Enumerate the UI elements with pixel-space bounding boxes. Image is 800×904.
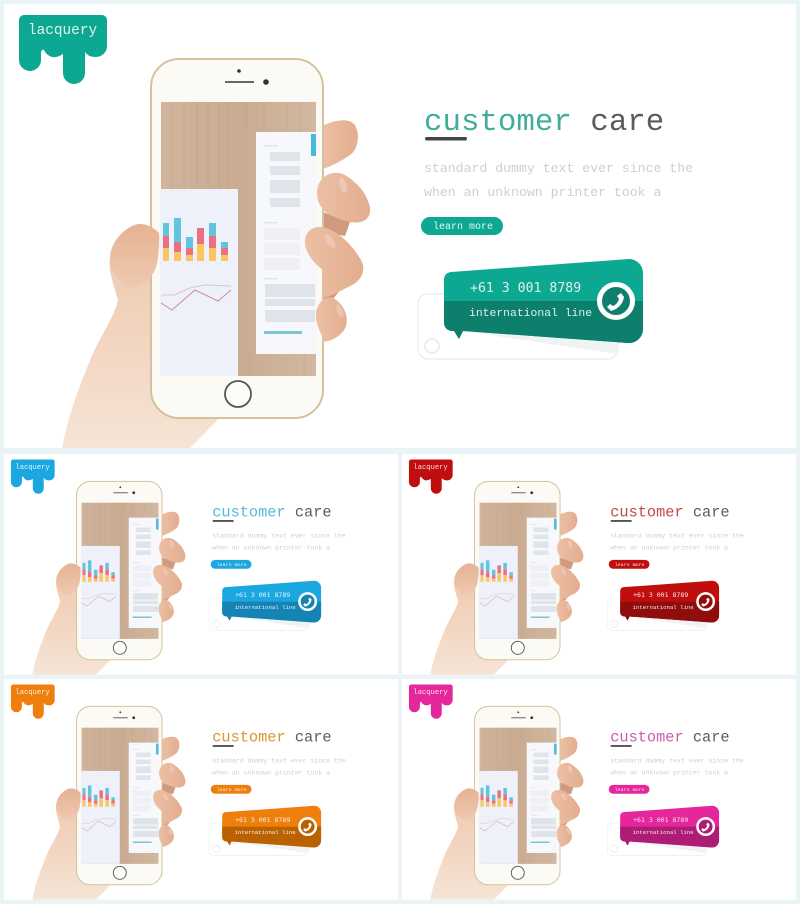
phone in hand — [430, 706, 583, 900]
phone callout: +61 3 001 8789 — [633, 591, 688, 599]
phone callout: +61 3 001 8789 — [235, 591, 290, 599]
button: learn more: learn more — [615, 562, 645, 568]
phone callout: +61 3 001 8789 — [235, 816, 290, 824]
logo: lacquery — [15, 464, 50, 472]
title: customer care — [212, 729, 332, 747]
logo: lacquery — [413, 464, 448, 472]
logo — [11, 684, 55, 719]
body text: standard dummy text ever since the — [424, 161, 693, 176]
panel: pink slide — [402, 679, 796, 900]
body text — [424, 161, 693, 200]
body text — [610, 757, 744, 776]
body text: standard dummy text ever since the — [610, 757, 744, 764]
title: customer care — [424, 105, 664, 140]
panel: orange slide — [4, 679, 398, 900]
button: learn more — [421, 217, 503, 235]
icon: telephone — [299, 818, 316, 835]
logo — [19, 15, 107, 84]
phone in hand — [32, 481, 185, 675]
phone callout — [620, 581, 719, 622]
phone callout: international line — [469, 308, 592, 320]
ghost phone — [418, 294, 620, 359]
button: learn more: learn more — [433, 221, 493, 233]
phone callout — [444, 259, 643, 343]
phone callout: +61 3 001 8789 — [470, 281, 581, 296]
logo: lacquery — [28, 23, 97, 39]
title underline — [213, 745, 234, 747]
body text: when an unknown printer took a — [424, 185, 661, 200]
phone callout — [620, 806, 719, 847]
body text: when an unknown printer took a — [212, 769, 330, 776]
body text — [212, 532, 346, 551]
phone callout: international line — [235, 604, 296, 611]
ghost phone — [607, 598, 708, 630]
title: customer care — [610, 504, 730, 522]
phone callout: international line — [633, 604, 694, 611]
button: learn more: learn more — [615, 787, 645, 793]
button: learn more: learn more — [217, 787, 247, 793]
button: learn more — [211, 560, 251, 569]
button: learn more: learn more — [217, 562, 247, 568]
phone callout: international line — [235, 829, 296, 836]
button: learn more — [211, 785, 251, 794]
panel: red slide — [402, 454, 796, 675]
panel: blue slide — [4, 454, 398, 675]
icon: telephone — [600, 284, 632, 318]
phone callout: +61 3 001 8789 — [633, 816, 688, 824]
logo — [11, 459, 55, 494]
body text: standard dummy text ever since the — [610, 532, 744, 539]
logo: lacquery — [413, 689, 448, 697]
title underline — [611, 520, 632, 522]
body text — [610, 532, 744, 551]
title: customer care — [212, 504, 332, 522]
phone in hand — [32, 706, 185, 900]
title underline — [213, 520, 234, 522]
title underline — [425, 137, 467, 140]
ghost phone — [209, 823, 310, 855]
panel: teal main slide — [4, 4, 796, 448]
phone in hand — [430, 481, 583, 675]
button: learn more — [609, 785, 649, 794]
body text: when an unknown printer took a — [610, 544, 728, 551]
body text: standard dummy text ever since the — [212, 757, 346, 764]
body text — [212, 757, 346, 776]
body text: when an unknown printer took a — [212, 544, 330, 551]
icon: telephone — [299, 593, 316, 610]
phone callout — [222, 806, 321, 847]
body text: standard dummy text ever since the — [212, 532, 346, 539]
ghost phone — [209, 598, 310, 630]
logo — [409, 684, 453, 719]
title: customer care — [610, 729, 730, 747]
ghost phone — [607, 823, 708, 855]
icon: telephone — [697, 593, 714, 610]
body text: when an unknown printer took a — [610, 769, 728, 776]
phone in hand — [62, 59, 370, 448]
title underline — [611, 745, 632, 747]
icon: telephone — [697, 818, 714, 835]
button: learn more — [609, 560, 649, 569]
logo: lacquery — [15, 689, 50, 697]
phone callout: international line — [633, 829, 694, 836]
logo — [409, 459, 453, 494]
phone callout — [222, 581, 321, 622]
